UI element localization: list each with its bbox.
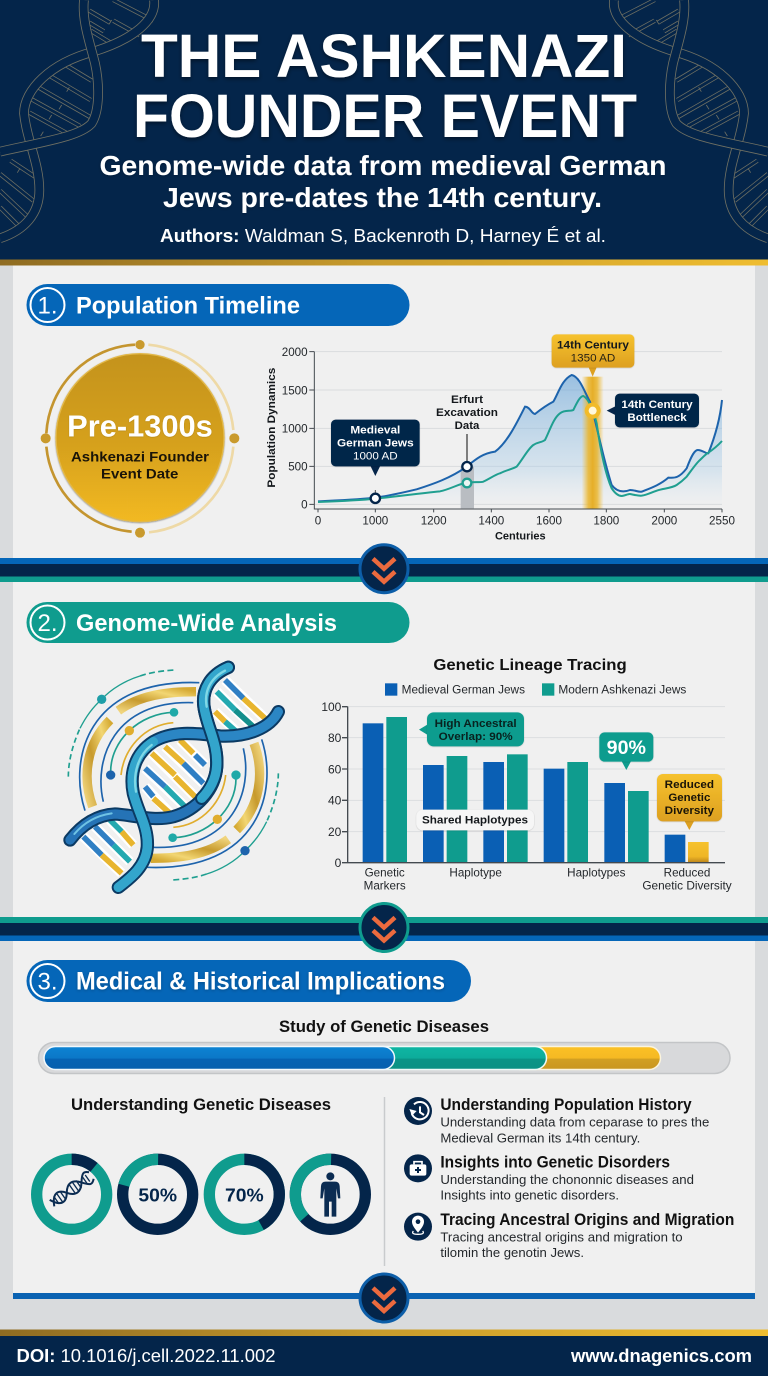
subtitle xyxy=(100,150,666,213)
x axis labels: 2000 xyxy=(651,515,678,528)
arrow: chevrons down xyxy=(360,1274,408,1322)
y axis labels: 500 xyxy=(288,461,308,474)
callout: high ancestral overlap: Overlap: 90% xyxy=(439,731,513,743)
axes xyxy=(342,707,725,863)
x axis labels: Genetic xyxy=(365,866,405,879)
y axis labels: 60 xyxy=(328,762,342,776)
y axis labels: 40 xyxy=(328,794,342,808)
section heading 2: Genome-Wide Analysis xyxy=(76,610,337,637)
y axis labels: 20 xyxy=(328,825,342,839)
legend xyxy=(385,683,686,697)
donut: 50%: 50% xyxy=(138,1184,177,1205)
x axis labels: 1200 xyxy=(421,515,447,528)
y axis labels: 1000 xyxy=(282,423,308,436)
section heading 2 xyxy=(26,602,410,643)
x axis labels: Reduced xyxy=(664,866,710,879)
vertical divider xyxy=(384,1097,386,1266)
item: ancestral origins: tilomin the genotin Jews. xyxy=(440,1245,584,1260)
item: population history: Understanding data from ceparase to pres the xyxy=(440,1115,709,1130)
callout: reduced genetic diversity: Genetic xyxy=(668,792,710,804)
subtitle: Genome-wide data from medieval German xyxy=(100,150,666,181)
divider 2 xyxy=(0,904,768,952)
panel: content background xyxy=(13,265,755,1295)
badge: Pre-1300s: Ashkenazi Founder xyxy=(71,449,210,465)
x axis labels: 1000 xyxy=(362,515,389,528)
y axis labels xyxy=(321,700,342,870)
callout: Medieval German Jews xyxy=(331,420,420,503)
header banner xyxy=(0,0,768,260)
donut charts xyxy=(37,1145,380,1244)
x axis labels: Genetic Diversity xyxy=(642,879,732,892)
decorative DNA left xyxy=(0,0,154,238)
item: ancestral origins: Tracing ancestral origins and migration to xyxy=(440,1230,683,1245)
divider 3 xyxy=(13,1274,755,1322)
item: genetic disorders: Understanding the chononnic diseases and xyxy=(440,1172,694,1187)
callout: 14th Century Bottleneck xyxy=(607,394,699,427)
callout: 14th Century 1350 AD: 14th Century xyxy=(557,340,630,352)
subtitle: Jews pre-dates the 14th century. xyxy=(163,182,602,213)
rungs xyxy=(83,680,265,873)
donut: 70%: 70% xyxy=(225,1184,264,1205)
section heading 3: 3. xyxy=(37,968,58,996)
y axis labels: 0 xyxy=(301,499,308,512)
callout: Erfurt Excavation Data: Data xyxy=(455,420,480,432)
callout: reduced genetic diversity: Diversity xyxy=(665,805,715,817)
title: FOUNDER EVENT xyxy=(133,82,637,150)
legend: Modern Ashkenazi Jews xyxy=(558,683,686,697)
bars xyxy=(363,717,709,863)
x axis labels: 1400 xyxy=(478,515,505,528)
y axis labels: 100 xyxy=(321,700,342,714)
header gold rule xyxy=(0,260,768,266)
item: ancestral origins xyxy=(404,1210,734,1260)
decorative DNA right xyxy=(614,0,768,238)
section heading 1: Population Timeline xyxy=(76,292,300,320)
footer xyxy=(0,1330,768,1376)
heading: study of genetic diseases: Study of Genetic Diseases xyxy=(279,1017,489,1036)
callout: Erfurt Excavation Data: Excavation xyxy=(436,407,498,419)
x axis labels: Haplotypes xyxy=(567,866,626,879)
item: genetic disorders: Insights into genetic disorders. xyxy=(440,1187,619,1202)
x axis labels xyxy=(364,866,732,892)
callout: 14th Century Bottleneck: Bottleneck xyxy=(627,412,687,424)
callout: Medieval German Jews: Medieval xyxy=(350,425,400,437)
callout: Medieval German Jews: German Jews xyxy=(337,438,414,450)
callout: 14th Century 1350 AD xyxy=(552,334,634,377)
x axis labels: 1800 xyxy=(593,515,620,528)
callout: high ancestral overlap: High Ancestral xyxy=(435,718,517,730)
badge: Pre-1300s xyxy=(41,340,239,538)
x axis labels: 1600 xyxy=(536,515,562,528)
y axis labels: 2000 xyxy=(282,346,308,359)
callout: reduced genetic diversity: Reduced xyxy=(665,779,714,791)
arrow: chevrons down xyxy=(360,545,408,593)
illustration: DNA helix with orbits xyxy=(68,667,278,887)
item: population history: Understanding Population History xyxy=(440,1095,692,1114)
progress bar xyxy=(38,1042,730,1074)
y axis labels xyxy=(282,346,308,512)
blue population curve xyxy=(318,375,722,501)
title xyxy=(133,22,637,150)
line chart: population timeline xyxy=(266,334,735,542)
website: www.dnagenics.com xyxy=(570,1346,752,1366)
orbit arcs upper left xyxy=(68,670,199,811)
y axis title: Population Dynamics xyxy=(266,368,278,488)
orbit arcs lower right xyxy=(147,739,278,880)
x axis title: Centuries xyxy=(495,530,546,542)
heading: understanding genetic diseases: Understanding Genetic Diseases xyxy=(71,1095,331,1114)
donut: person icon xyxy=(281,1145,380,1244)
arrow: chevrons down xyxy=(360,904,408,952)
callout: Erfurt Excavation Data xyxy=(436,394,498,487)
x axis labels: Markers xyxy=(364,879,406,892)
item: population history: Medieval German its 14th century. xyxy=(440,1130,640,1145)
teal population curve xyxy=(318,396,722,502)
bar chart: genetic lineage tracing xyxy=(321,657,732,892)
axes xyxy=(309,352,722,512)
callout: 14th Century Bottleneck: 14th Century xyxy=(621,399,693,411)
donut: DNA icon xyxy=(37,1159,107,1229)
x axis labels: Haplotype xyxy=(449,866,502,879)
section heading 1: 1. xyxy=(37,292,58,320)
y axis labels: 0 xyxy=(335,856,342,870)
callout: 90% xyxy=(599,732,653,770)
callout: 14th Century 1350 AD: 1350 AD xyxy=(571,353,615,365)
y axis labels: 80 xyxy=(328,731,342,745)
badge: Pre-1300s: Pre-1300s xyxy=(67,410,213,444)
x axis labels: 0 xyxy=(315,515,322,528)
x axis labels xyxy=(315,515,735,528)
item: genetic disorders xyxy=(404,1152,694,1202)
DOI: DOI: 10.1016/j.cell.2022.11.002 xyxy=(16,1346,276,1366)
callout: shared haplotypes: Shared Haplotypes xyxy=(422,815,528,827)
callout: Medieval German Jews: 1000 AD xyxy=(353,451,398,463)
donut: 70% xyxy=(209,1159,279,1229)
item: genetic disorders: Insights into Genetic Disorders xyxy=(440,1152,670,1171)
authors: Authors: Waldman S, Backenroth D, Harney É et al. xyxy=(160,226,606,246)
section heading 2: 2. xyxy=(37,610,58,637)
helix strands xyxy=(70,667,278,887)
callout: shared haplotypes xyxy=(416,810,534,830)
divider 1 xyxy=(0,545,768,593)
title: THE ASHKENAZI xyxy=(141,22,627,90)
callout: 90%: 90% xyxy=(607,738,646,759)
badge: Pre-1300s: Event Date xyxy=(101,465,179,481)
marker: bottleneck point xyxy=(585,403,601,419)
list: implications xyxy=(404,1095,734,1260)
section heading 3 xyxy=(26,960,471,1002)
section heading 1 xyxy=(26,284,410,326)
callout: reduced genetic diversity xyxy=(657,774,722,830)
x axis labels: 2550 xyxy=(709,515,735,528)
chart title: Genetic Lineage Tracing xyxy=(433,657,627,674)
callout: high ancestral overlap xyxy=(419,712,524,746)
item: ancestral origins: Tracing Ancestral Origins and Migration xyxy=(440,1210,734,1229)
callout: Erfurt Excavation Data: Erfurt xyxy=(451,394,483,406)
y axis labels: 1500 xyxy=(282,384,308,397)
donut: 50% xyxy=(115,1151,201,1237)
section heading 3: Medical & Historical Implications xyxy=(76,968,445,996)
item: population history xyxy=(404,1095,709,1145)
legend: Medieval German Jews xyxy=(402,683,525,697)
